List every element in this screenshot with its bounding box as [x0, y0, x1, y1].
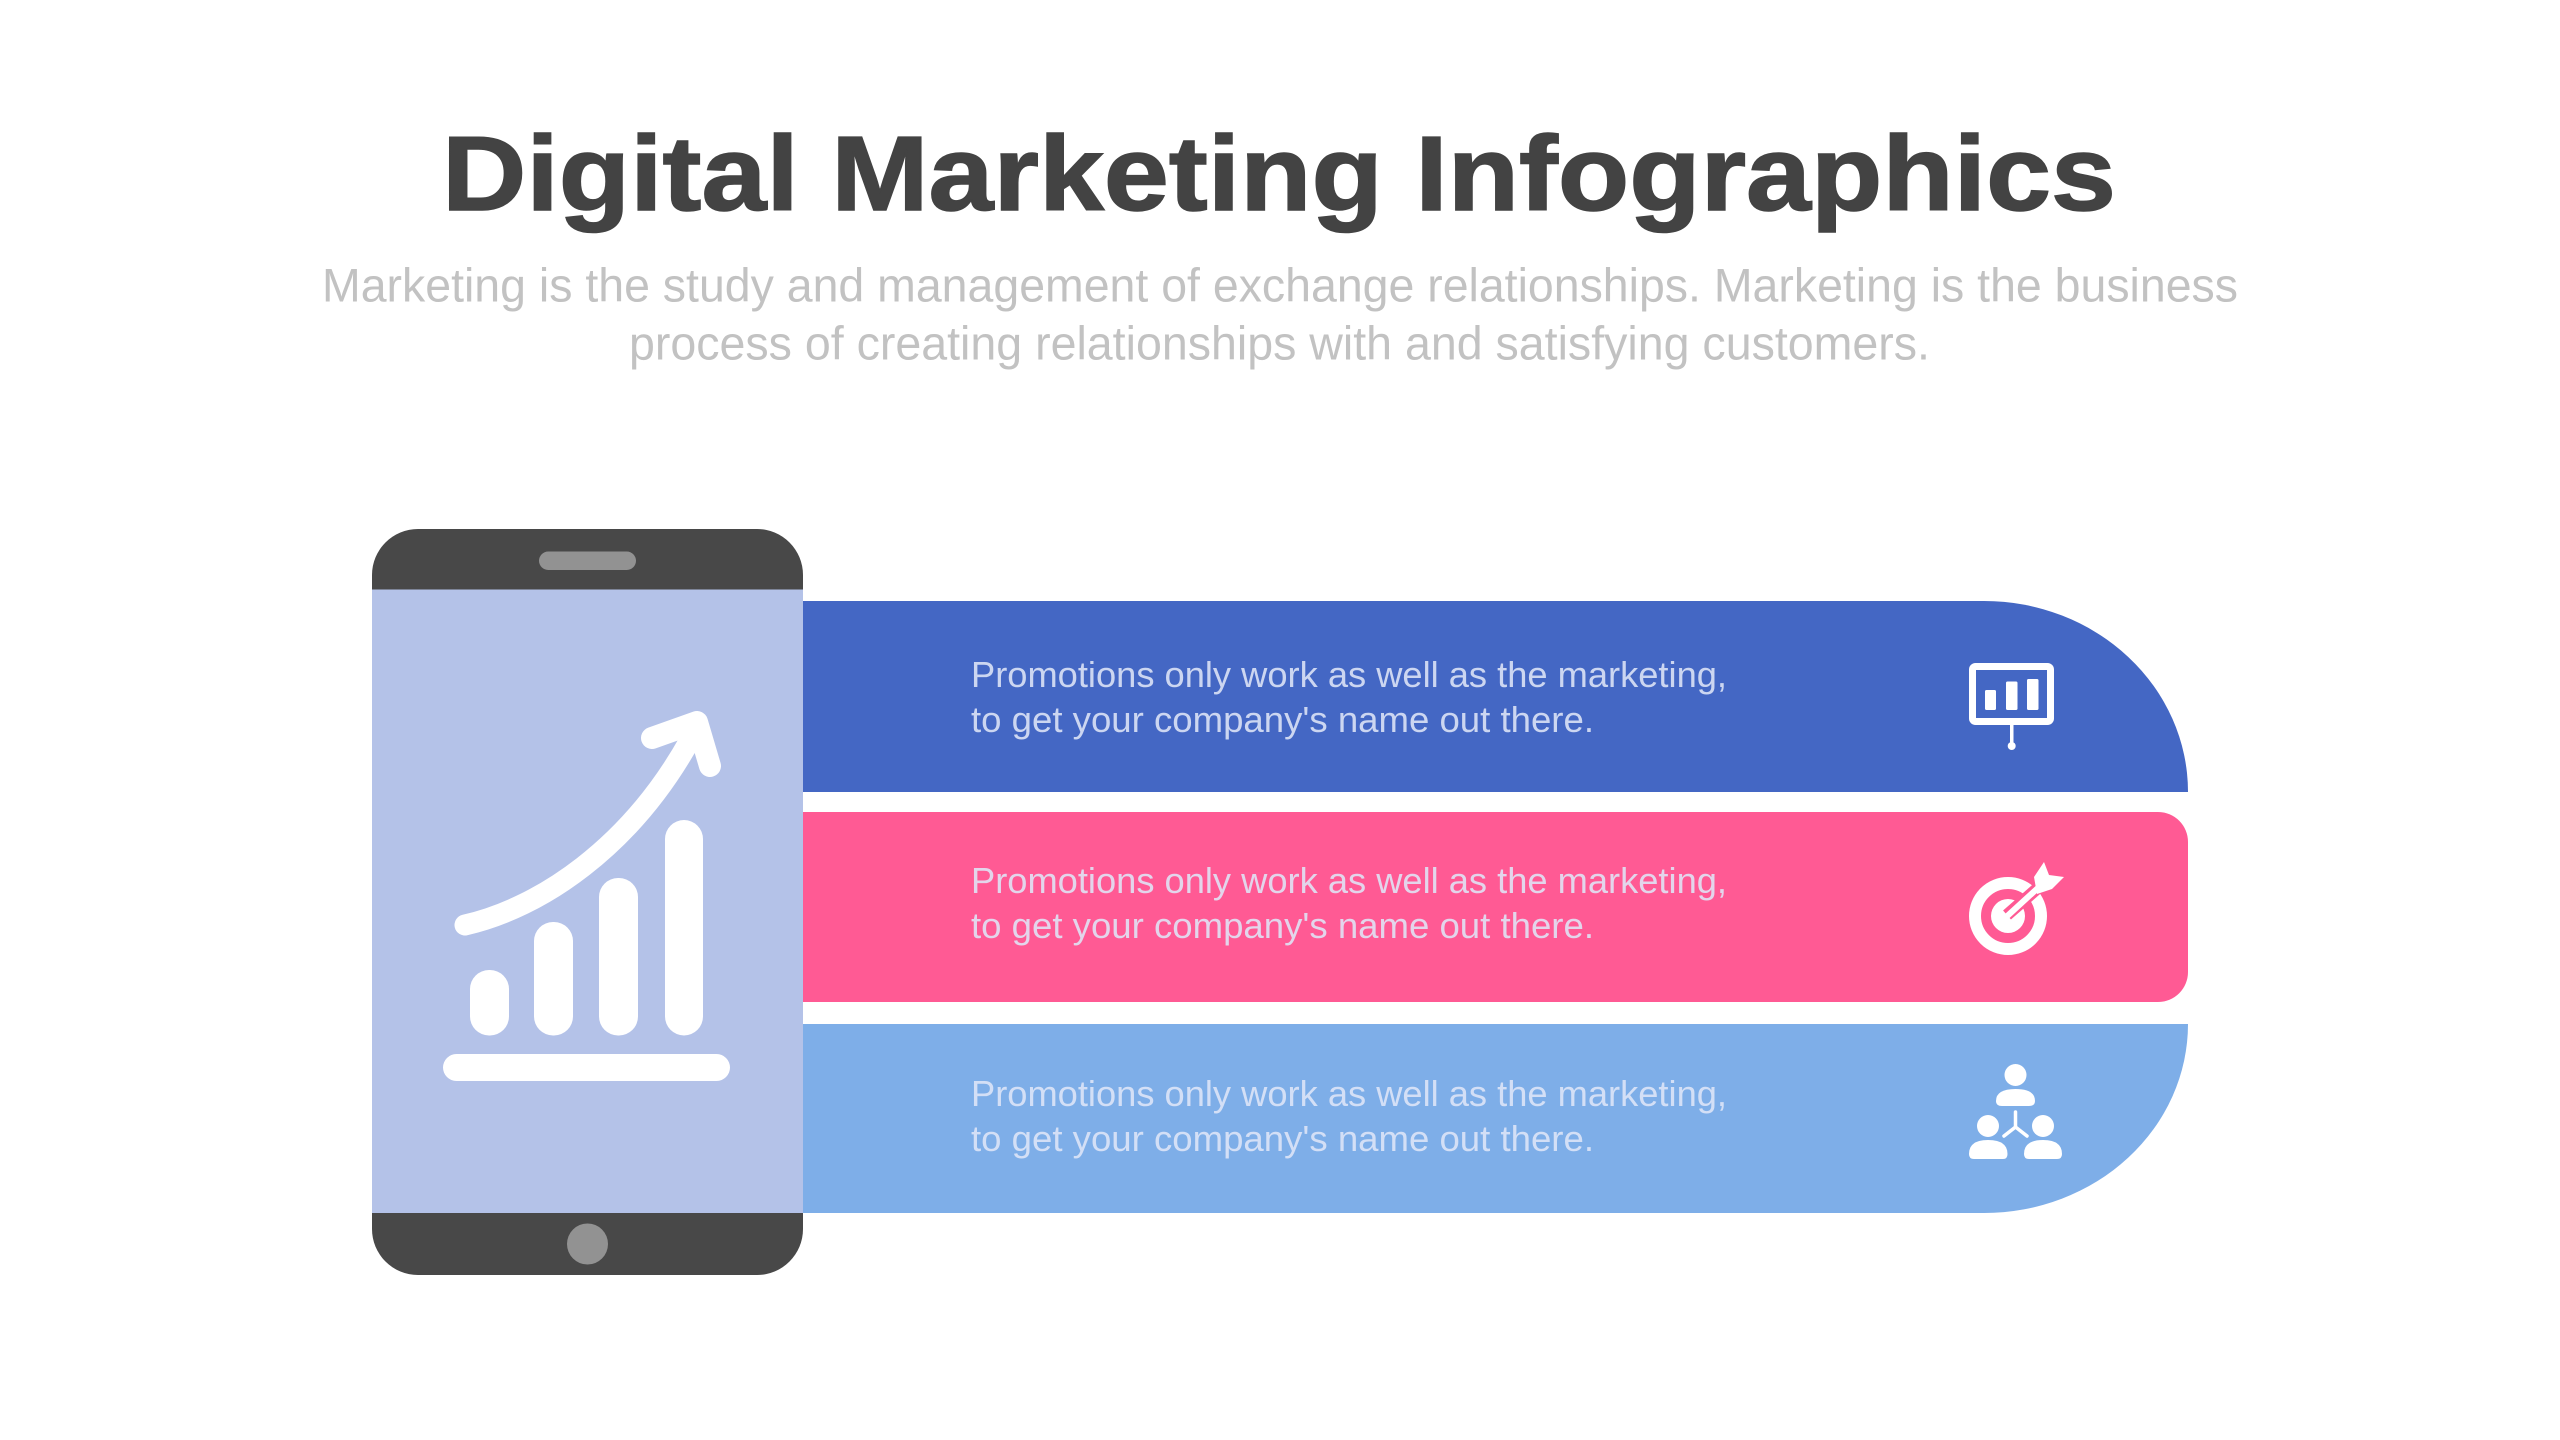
- title: Digital Marketing Infographics: [442, 115, 2116, 233]
- panel: pink band: [802, 812, 2188, 1002]
- panel: blue band: [802, 601, 2188, 792]
- icon: team network: [1969, 1064, 2062, 1159]
- blue band text: Promotions only work as well as the marketing,: [971, 654, 1727, 695]
- phone body: [372, 529, 803, 1275]
- subtitle text block: [322, 258, 2238, 370]
- phone home button: [567, 1224, 608, 1264]
- light blue band text: [971, 1073, 1727, 1159]
- light blue band shape: [802, 1024, 2188, 1213]
- phone: [372, 529, 803, 1275]
- subtitle text block: Marketing is the study and management of exchange relationships. Marketing is the business: [322, 258, 2238, 312]
- icon: target with dart: [1975, 862, 2064, 949]
- subtitle text block: process of creating relationships with and satisfying customers.: [629, 316, 1930, 370]
- blue band shape: [802, 601, 2188, 792]
- pink band text: [971, 860, 1727, 946]
- pink band shape: [802, 812, 2188, 1002]
- panel: light blue band: [802, 1024, 2188, 1213]
- icon: growth chart: [443, 722, 730, 1081]
- light blue band text: to get your company's name out there.: [971, 1118, 1594, 1159]
- blue band text: [971, 654, 1727, 740]
- icon: presentation board: [1972, 666, 2050, 750]
- pink band text: Promotions only work as well as the marketing,: [971, 860, 1727, 901]
- light blue band text: Promotions only work as well as the marketing,: [971, 1073, 1727, 1114]
- phone speaker: [539, 552, 636, 570]
- blue band text: to get your company's name out there.: [971, 699, 1594, 740]
- phone screen: [372, 590, 803, 1213]
- pink band text: to get your company's name out there.: [971, 905, 1594, 946]
